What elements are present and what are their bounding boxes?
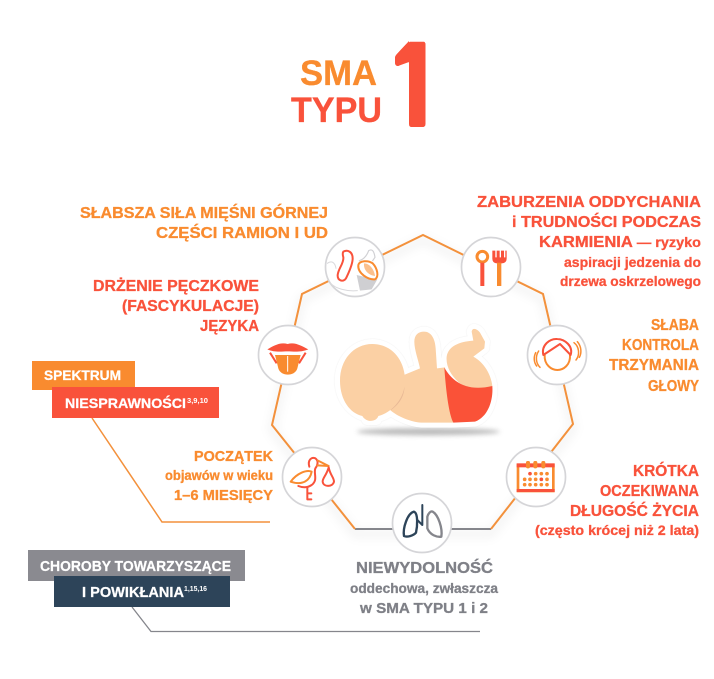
text: respiratory failure: oddechowa, zwłaszcza xyxy=(350,580,498,596)
label: spektrum niesprawności xyxy=(32,361,219,418)
icon: tongue xyxy=(258,326,318,384)
polygon frame xyxy=(272,235,573,534)
text: breathing and feeding: KARMIENIA — ryzyko xyxy=(539,234,701,251)
label box: choroby towarzyszące: CHOROBY TOWARZYSZĄCE xyxy=(40,559,231,575)
text: poor head control xyxy=(609,317,700,395)
label box: niesprawności: NIESPRAWNOŚCI xyxy=(65,394,186,411)
text: poor head control: GŁOWY xyxy=(648,378,700,395)
icon: spoon and fork xyxy=(462,238,520,296)
label box: niesprawności xyxy=(52,387,219,418)
baby neck shade xyxy=(388,377,404,410)
title xyxy=(291,41,426,127)
baby diaper xyxy=(444,368,492,423)
text: short life expectancy: KRÓTKA xyxy=(633,462,699,480)
text: respiratory failure xyxy=(350,559,498,617)
icon: head shaking xyxy=(528,326,586,384)
text: weaker arm and thigh muscles: CZĘŚCI RAMION I UD xyxy=(156,224,328,242)
title: number 1 xyxy=(395,41,426,127)
label box: spektrum: SPEKTRUM xyxy=(44,367,121,383)
label box: choroby towarzyszące xyxy=(28,550,245,581)
label: choroby towarzyszące i powikłania xyxy=(28,550,245,607)
text: poor head control: TRZYMANIA xyxy=(609,357,699,374)
label box: niesprawności: 3,9,10 xyxy=(187,398,208,405)
baby head xyxy=(340,344,405,421)
text: tongue fasciculations: JĘZYKA xyxy=(200,318,259,335)
text: symptom onset: objawów w wieku xyxy=(165,468,273,483)
text: poor head control: KONTROLA xyxy=(622,337,699,354)
text: breathing and feeding: ZABURZENIA ODDYCHANIA xyxy=(477,194,701,211)
title: number 1: 1 xyxy=(381,17,449,153)
baby white halo xyxy=(340,329,492,423)
text: breathing and feeding: drzewa oskrzelowego xyxy=(560,273,701,289)
text: weaker arm and thigh muscles: SŁABSZA SIŁA MIĘŚNI GÓRNEJ xyxy=(80,204,328,222)
baby body xyxy=(388,332,453,423)
text: breathing and feeding: i TRUDNOŚCI PODCZAS xyxy=(512,213,701,231)
baby leg xyxy=(447,329,492,389)
icon: lungs xyxy=(392,494,452,552)
text: short life expectancy: OCZEKIWANA xyxy=(600,483,699,500)
text: short life expectancy xyxy=(535,462,699,538)
text: tongue fasciculations: DRŻENIE PĘCZKOWE xyxy=(93,278,259,295)
text: weaker arm and thigh muscles xyxy=(80,204,328,242)
text: tongue fasciculations xyxy=(93,278,259,335)
baby shadow xyxy=(357,428,500,435)
text: breathing and feeding: aspiracji jedzenia do xyxy=(564,254,701,270)
text: symptom onset xyxy=(165,448,273,504)
connector: choroby towarzyszące xyxy=(132,607,480,632)
text: respiratory failure: NIEWYDOLNOŚĆ xyxy=(356,559,493,577)
label box: spektrum xyxy=(32,361,135,390)
icon: stork xyxy=(282,448,342,506)
text: short life expectancy: DŁUGOŚĆ ŻYCIA xyxy=(570,502,699,520)
title: TYPU: TYPU xyxy=(291,91,382,130)
text: symptom onset: 1–6 MIESIĘCY xyxy=(174,487,273,504)
icon: calendar xyxy=(506,448,566,506)
text: breathing and feeding xyxy=(477,194,701,289)
connector: spektrum niesprawności xyxy=(92,418,270,522)
baby illustration xyxy=(340,329,500,435)
text: respiratory failure: w SMA TYPU 1 i 2 xyxy=(359,600,488,617)
text: short life expectancy: (często krócej niż 2 lata) xyxy=(535,522,699,538)
title: SMA: SMA xyxy=(300,54,377,93)
text: tongue fasciculations: (FASCYKULACJE) xyxy=(122,298,259,315)
label box: powikłania: 1,15,16 xyxy=(184,586,207,593)
text: poor head control: SŁABA xyxy=(651,317,699,334)
icon: arm and leg muscles xyxy=(326,238,384,296)
text: symptom onset: POCZĄTEK xyxy=(194,448,273,465)
label box: powikłania xyxy=(54,576,230,607)
label box: powikłania: I POWIKŁANIA xyxy=(82,585,185,601)
